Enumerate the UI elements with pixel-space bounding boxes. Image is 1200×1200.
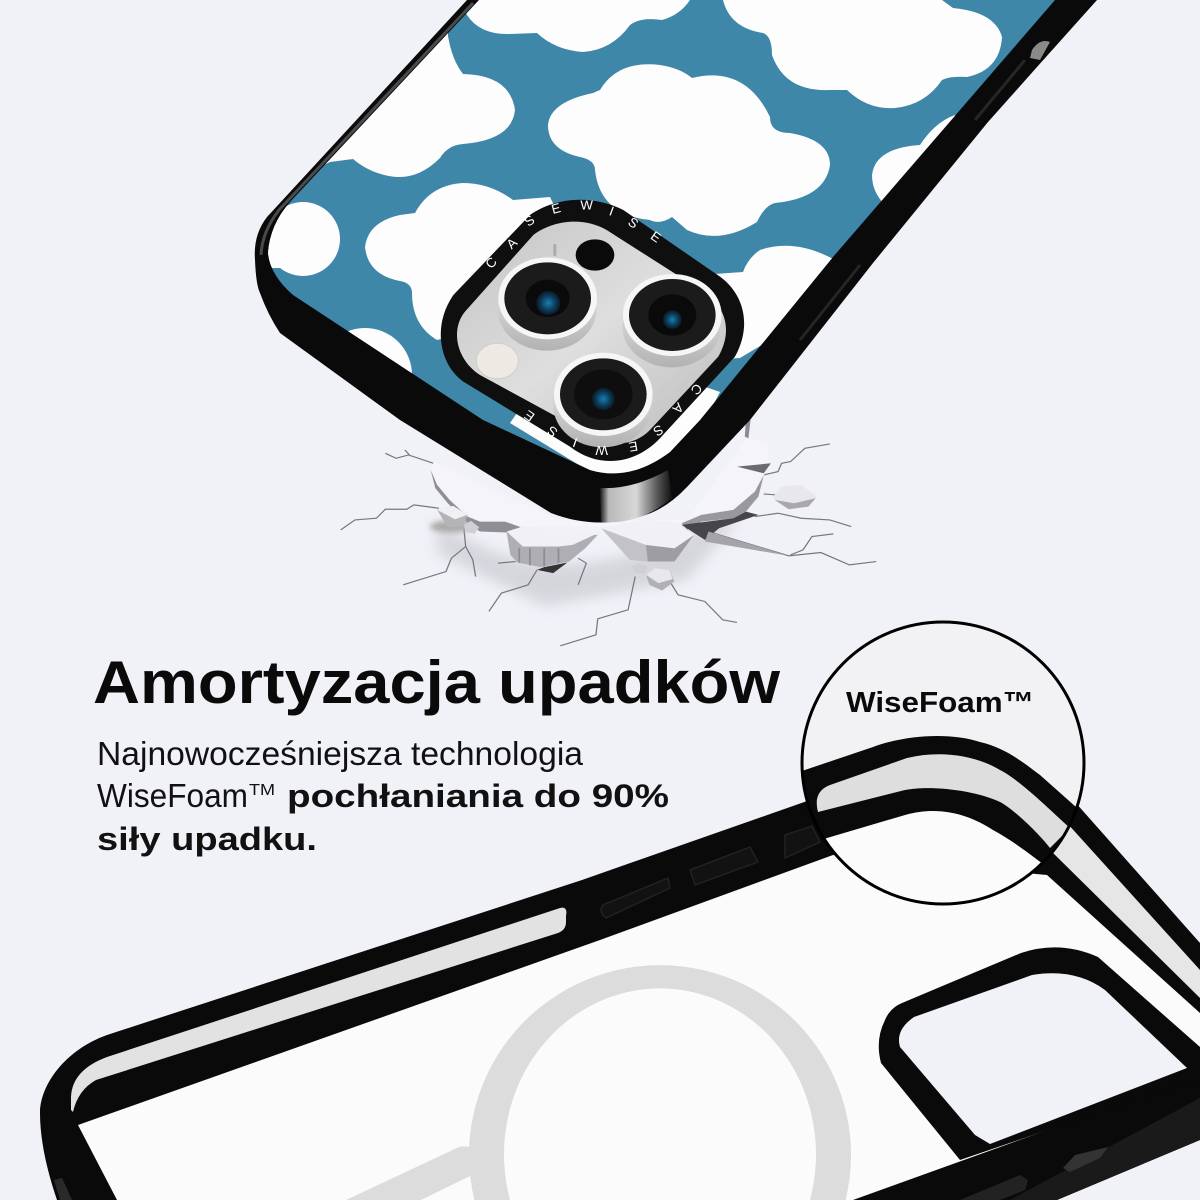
side buttons [601, 826, 820, 918]
side button highlight [1030, 41, 1050, 60]
body text: pochłaniania do 90% [287, 778, 669, 814]
camera module [441, 198, 744, 461]
body text: TM [249, 782, 275, 799]
body text [97, 735, 669, 857]
casewise lettering: S [651, 422, 666, 439]
title: Amortyzacja upadków [93, 649, 780, 716]
sensor [576, 239, 614, 271]
casewise lettering: S [521, 212, 537, 229]
rock: left chunk [507, 527, 598, 573]
casewise lettering: E [521, 407, 537, 425]
casewise lettering: I [571, 435, 579, 450]
floor crack impact [341, 420, 876, 646]
right strip [1050, 823, 1200, 998]
small rocks [430, 485, 817, 590]
casewise lettering: S [625, 214, 641, 232]
casewise lettering: C [688, 380, 705, 398]
magnified foam strip [817, 754, 1070, 848]
magnified bumper [804, 736, 1076, 862]
casewise lettering: W [595, 443, 608, 458]
lens 2 [622, 274, 722, 367]
side strip left [71, 908, 566, 1112]
casewise lettering: E [550, 200, 562, 217]
phone back: cloud pattern [268, 0, 1055, 474]
casewise lettering: A [503, 235, 520, 252]
magnified clear back [826, 811, 1041, 902]
magnet bar [346, 1146, 480, 1200]
casewise lettering: A [670, 400, 687, 417]
phone top: black bumper [254, 0, 1097, 522]
casewise lettering: E [627, 438, 639, 455]
magnetic ring [469, 965, 851, 1200]
lens 3 [553, 353, 653, 447]
crack lines [341, 444, 876, 646]
lower bumper sheen [1010, 1098, 1200, 1200]
body text: siły upadku. [97, 821, 317, 857]
casewise lettering: W [580, 198, 593, 213]
lower ports [1063, 1147, 1108, 1172]
callout label: WiseFoam™ [846, 687, 1034, 719]
casewise lettering: S [544, 423, 560, 440]
lens 1 [498, 257, 597, 351]
casewise lettering: I [607, 203, 616, 219]
WiseFoam magnifier callout [790, 620, 1090, 910]
body text: WiseFoam [97, 777, 248, 814]
camera cutout [879, 947, 1200, 1160]
flash [476, 343, 518, 379]
phone bottom: clear case [40, 800, 1200, 1200]
casewise lettering: E [648, 228, 664, 246]
rock: right chunk [601, 520, 694, 562]
bumper gloss highlight [600, 470, 672, 522]
body text: Najnowocześniejsza technologia [97, 735, 584, 772]
raised floor plates [432, 437, 769, 527]
casewise lettering: C [482, 254, 500, 271]
casewise lettering [482, 198, 705, 458]
clouds [250, 0, 1002, 490]
clear back panel [78, 855, 1200, 1200]
